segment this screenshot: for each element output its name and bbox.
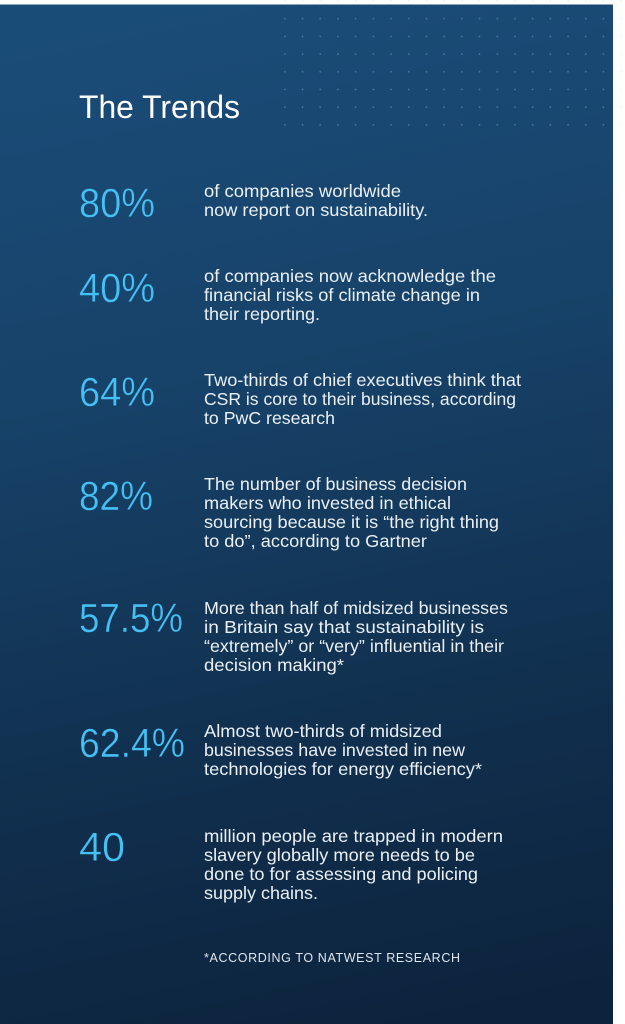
stat: 40%: 40% [79, 265, 155, 311]
stat: 64% [79, 369, 521, 428]
stat: 82%: sourcing because it is “the right thing [204, 512, 499, 532]
stat: 80%: of companies worldwide [204, 181, 401, 201]
stat: 40 million: million people are trapped in modern [204, 826, 503, 846]
stat: 62.4% [79, 720, 482, 779]
dot grid decoration [276, 10, 612, 134]
stat: 82%: makers who invested in ethical [204, 493, 451, 513]
background page dots [276, 0, 625, 135]
stat: 62.4%: Almost two-thirds of midsized [204, 721, 442, 741]
stat: 82%: The number of business decision [204, 474, 467, 494]
title: The Trends [79, 89, 240, 125]
stat: 40 million: supply chains. [204, 883, 318, 903]
stat: 80%: now report on sustainability. [204, 200, 428, 220]
stat: 40% [79, 265, 496, 324]
stat: 40 million: 40 [79, 824, 125, 870]
stat: 40 million: slavery globally more needs to be [204, 845, 475, 865]
stat: 57.5%: decision making* [204, 655, 344, 675]
stat: 57.5%: “extremely” or “very” influential in their [204, 636, 504, 656]
stat: 82% [79, 473, 499, 551]
stat: 64%: Two-thirds of chief executives think that [204, 370, 521, 390]
stat: 40 million: done to for assessing and policing [204, 864, 478, 884]
stat: 40%: their reporting. [204, 304, 320, 324]
stat: 40%: of companies now acknowledge the [204, 266, 496, 286]
stat: 80% [79, 180, 428, 226]
footnote: *ACCORDING TO NATWEST RESEARCH [204, 951, 460, 965]
stat: 57.5%: in Britain say that sustainability is [204, 617, 484, 637]
stat: 62.4%: 62.4% [79, 720, 185, 766]
stat: 82%: to do”, according to Gartner [204, 531, 427, 551]
stat: 64%: CSR is core to their business, according [204, 389, 516, 409]
stat: 64%: to PwC research [204, 408, 335, 428]
stat: 40 million [79, 824, 503, 903]
stat: 62.4%: businesses have invested in new [204, 740, 465, 760]
stat: 57.5%: 57.5% [79, 595, 183, 641]
stat: 57.5% [79, 595, 508, 675]
stat: 57.5%: More than half of midsized businesses [204, 598, 508, 618]
stat: 82%: 82% [79, 473, 153, 519]
stat: 62.4%: technologies for energy efficiency* [204, 759, 482, 779]
stat: 64%: 64% [79, 369, 155, 415]
stat: 40%: financial risks of climate change in [204, 285, 480, 305]
stat: 80%: 80% [79, 180, 155, 226]
